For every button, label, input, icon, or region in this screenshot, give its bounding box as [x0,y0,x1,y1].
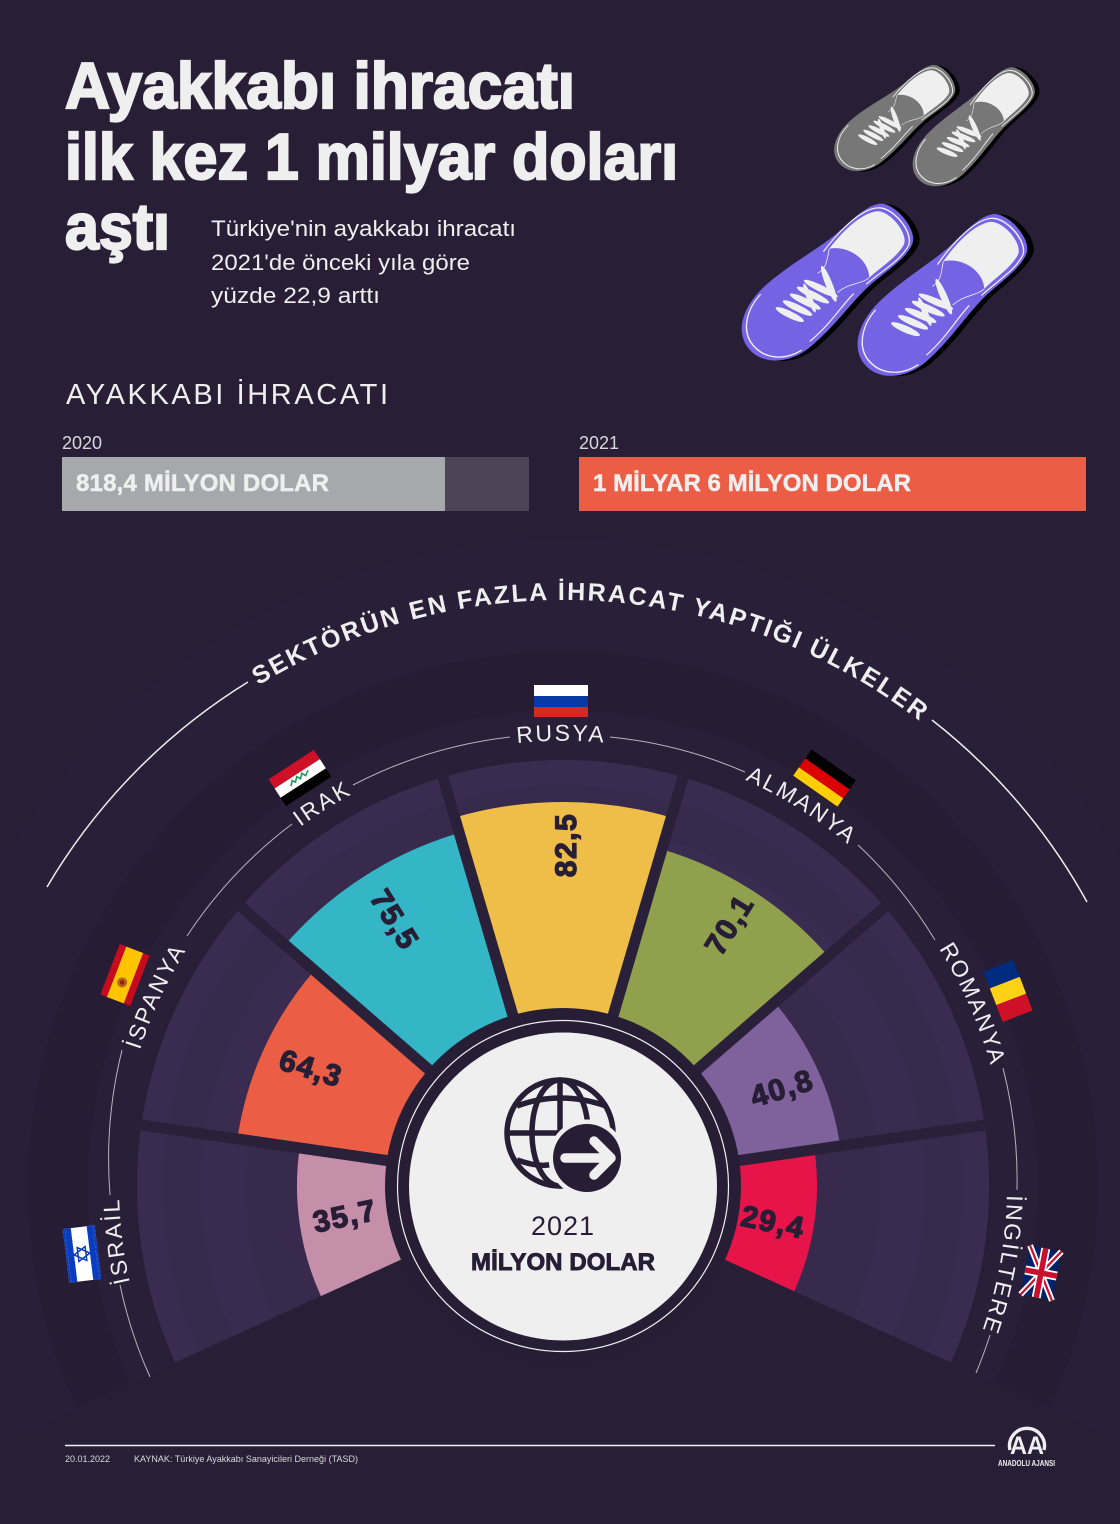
value labels: 75,5 [363,884,425,956]
footer source: KAYNAK: Türkiye Ayakkabı Sanayicileri Derneği (TASD) [134,1454,358,1464]
heading: top export countries curved [46,578,1088,902]
country labels: İSPANYA [122,948,186,1048]
value labels: 64,3 [275,1044,346,1094]
flag: Spain [100,944,150,1006]
separators [136,774,990,1186]
segment: Romanya 40,8 [563,1002,840,1186]
logo: Anadolu Ajansi [998,1428,1055,1468]
title: ilk kez 1 milyar doları [65,120,678,193]
value labels: 82,5 [550,813,583,877]
flag: Russia [534,685,588,717]
icon: globe with arrow [507,1080,626,1196]
icon: purple shoes 2021 [724,186,1050,397]
country labels: ROMANYA [940,942,1004,1065]
segment: Almanya 70,1 [563,849,828,1186]
country labels: ALMANYA [745,768,853,844]
title [65,49,678,263]
logo: Anadolu Ajansi: AA [1010,1432,1044,1460]
fan background [150,773,976,1357]
center unit: MİLYON DOLAR [471,1249,655,1276]
country labels: İSRAİL [100,1200,130,1284]
bar: 2021 exports: 2021 [579,433,619,453]
bar: 2020 exports: 2020 [62,433,102,453]
value labels [275,813,818,1246]
title: Ayakkabı ihracatı [65,49,575,122]
value labels: 40,8 [747,1064,818,1114]
background concentric rings [0,596,1120,1430]
flag: Romania [983,960,1033,1022]
flag: Israel [63,1225,101,1283]
center disc [385,1008,741,1364]
subtitle: Türkiye'nin ayakkabı ihracatı [211,216,516,241]
value labels: 35,7 [310,1194,380,1240]
flag: Iraq [269,750,331,806]
title: aştı [65,190,170,263]
country labels: İNGİLTERE [983,1197,1027,1334]
bar: 2021 exports [579,433,1086,511]
footer line [65,1444,995,1446]
chart: fan of countries [136,773,990,1357]
country labels: IRAK [292,781,351,826]
flag: United Kingdom [1021,1245,1061,1301]
footer date: 20.01.2022 [65,1454,110,1464]
subtitle [211,216,516,308]
segment: İspanya 64,3 [237,970,563,1186]
segment: Rusya 82,5 [455,802,671,1186]
section heading: shoe exports: AYAKKABI İHRACATI [66,378,388,411]
value labels: 70,1 [699,889,761,961]
segment: İngiltere 29,4 [563,1150,817,1291]
subtitle: yüzde 22,9 arttı [211,283,380,308]
flag: Germany [793,749,856,807]
country labels: RUSYA [518,724,604,743]
logo: Anadolu Ajansi: ANADOLU AJANSI [998,1459,1055,1468]
value labels: 29,4 [738,1200,808,1246]
country labels [100,724,1027,1334]
center year: 2021 [531,1211,595,1241]
segment: İsrail 35,7 [297,1148,563,1296]
segment: Irak 75,5 [285,833,563,1186]
heading: top export countries curved: SEKTÖRÜN EN FAZLA İHRACAT YAPTIĞI ÜLKELER [252,578,927,721]
subtitle: 2021'de önceki yıla göre [211,250,470,275]
bar: 2020 exports [62,433,529,511]
bar: 2021 exports: 1 MİLYAR 6 MİLYON DOLAR [593,470,911,497]
icon: gray shoes 2020 [823,53,1051,201]
country arc line [109,737,1017,1377]
bar: 2020 exports: 818,4 MİLYON DOLAR [76,470,329,497]
